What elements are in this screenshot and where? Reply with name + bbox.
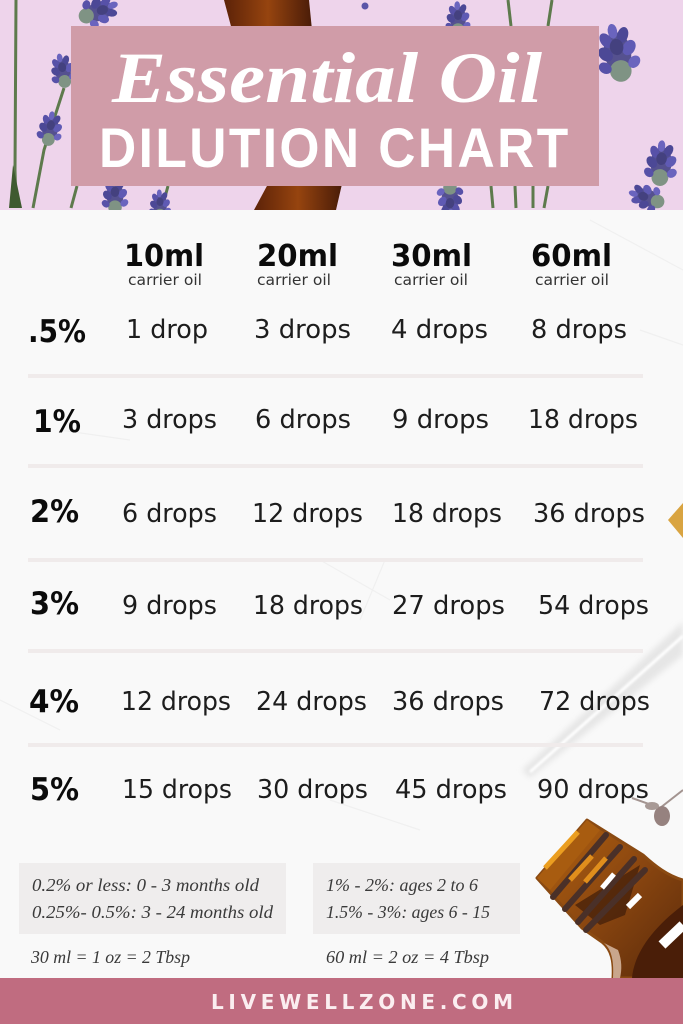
row 5%: 15 drops <box>122 775 232 805</box>
table column headers <box>124 239 612 289</box>
conversion note: 30 ml: 30 ml = 1 oz = 2 Tbsp <box>30 947 190 967</box>
row 4%: 12 drops <box>121 687 231 717</box>
row 2%: 18 drops <box>392 499 502 529</box>
row 5%: 5% <box>30 772 79 808</box>
row 3% <box>30 586 649 622</box>
row 2%: 2% <box>30 494 79 530</box>
note box: children <box>313 863 520 934</box>
note box: infants <box>19 863 286 934</box>
dropper <box>522 503 683 778</box>
row 1%: 1% <box>33 404 81 440</box>
row 3%: 54 drops <box>538 591 649 621</box>
row 4%: 72 drops <box>539 687 650 717</box>
footer band: LIVEWELLZONE.COM <box>211 990 513 1014</box>
row 5%: 90 drops <box>537 775 649 805</box>
table column headers: 10ml <box>124 239 204 274</box>
row 5%: 45 drops <box>395 775 507 805</box>
table column headers: carrier oil <box>394 271 468 289</box>
table column headers: carrier oil <box>128 271 202 289</box>
note box: children: 1% - 2%: ages 2 to 6 <box>326 875 478 895</box>
table column headers: 30ml <box>391 239 472 274</box>
bottle body <box>537 820 683 978</box>
note box: children: 1.5% - 3%: ages 6 - 15 <box>326 902 490 922</box>
row 2%: 36 drops <box>533 499 645 529</box>
row 1%: 6 drops <box>255 405 351 435</box>
icon: lavender flowers <box>34 0 681 220</box>
row 3%: 9 drops <box>122 591 217 621</box>
row 1% <box>33 404 638 440</box>
row 4%: 36 drops <box>392 687 504 717</box>
header photo: lavender and bottles <box>0 0 683 220</box>
row .5%: 3 drops <box>254 315 351 345</box>
row 5%: 30 drops <box>257 775 368 805</box>
row 2% <box>30 494 645 530</box>
table column headers: carrier oil <box>257 271 331 289</box>
icon: lavender stems <box>15 0 552 208</box>
table column headers: carrier oil <box>535 271 609 289</box>
row .5% <box>28 314 627 350</box>
row 1%: 9 drops <box>392 405 489 435</box>
row 3%: 18 drops <box>253 591 363 621</box>
conversion note: 60 ml: 60 ml = 2 oz = 4 Tbsp <box>326 947 489 967</box>
icon: amber bottles <box>224 0 312 26</box>
title line one: Essential Oil <box>111 38 542 118</box>
row .5%: 8 drops <box>531 315 627 345</box>
row 2%: 6 drops <box>122 499 217 529</box>
note box: infants: 0.2% or less: 0 - 3 months old <box>32 875 260 895</box>
row 1%: 18 drops <box>528 405 638 435</box>
title line two: DILUTION CHART <box>99 117 568 179</box>
row .5%: .5% <box>28 314 86 350</box>
table column headers: 20ml <box>257 239 338 274</box>
title panel <box>71 26 599 186</box>
row 4%: 4% <box>29 684 79 720</box>
row 5% <box>30 772 649 808</box>
table column headers: 60ml <box>531 239 612 274</box>
icon: dried lavender sprig <box>632 790 683 826</box>
row 3%: 3% <box>30 586 79 622</box>
row .5%: 4 drops <box>391 315 488 345</box>
row .5%: 1 drop <box>126 315 208 345</box>
row 2%: 12 drops <box>252 499 363 529</box>
row 4% <box>29 684 650 720</box>
row 1%: 3 drops <box>122 405 217 435</box>
row 4%: 24 drops <box>256 687 367 717</box>
footer band <box>0 978 683 1024</box>
icon: amber glass bottle <box>537 820 683 978</box>
row 3%: 27 drops <box>392 591 505 621</box>
note box: infants: 0.25%- 0.5%: 3 - 24 months old <box>32 902 274 922</box>
